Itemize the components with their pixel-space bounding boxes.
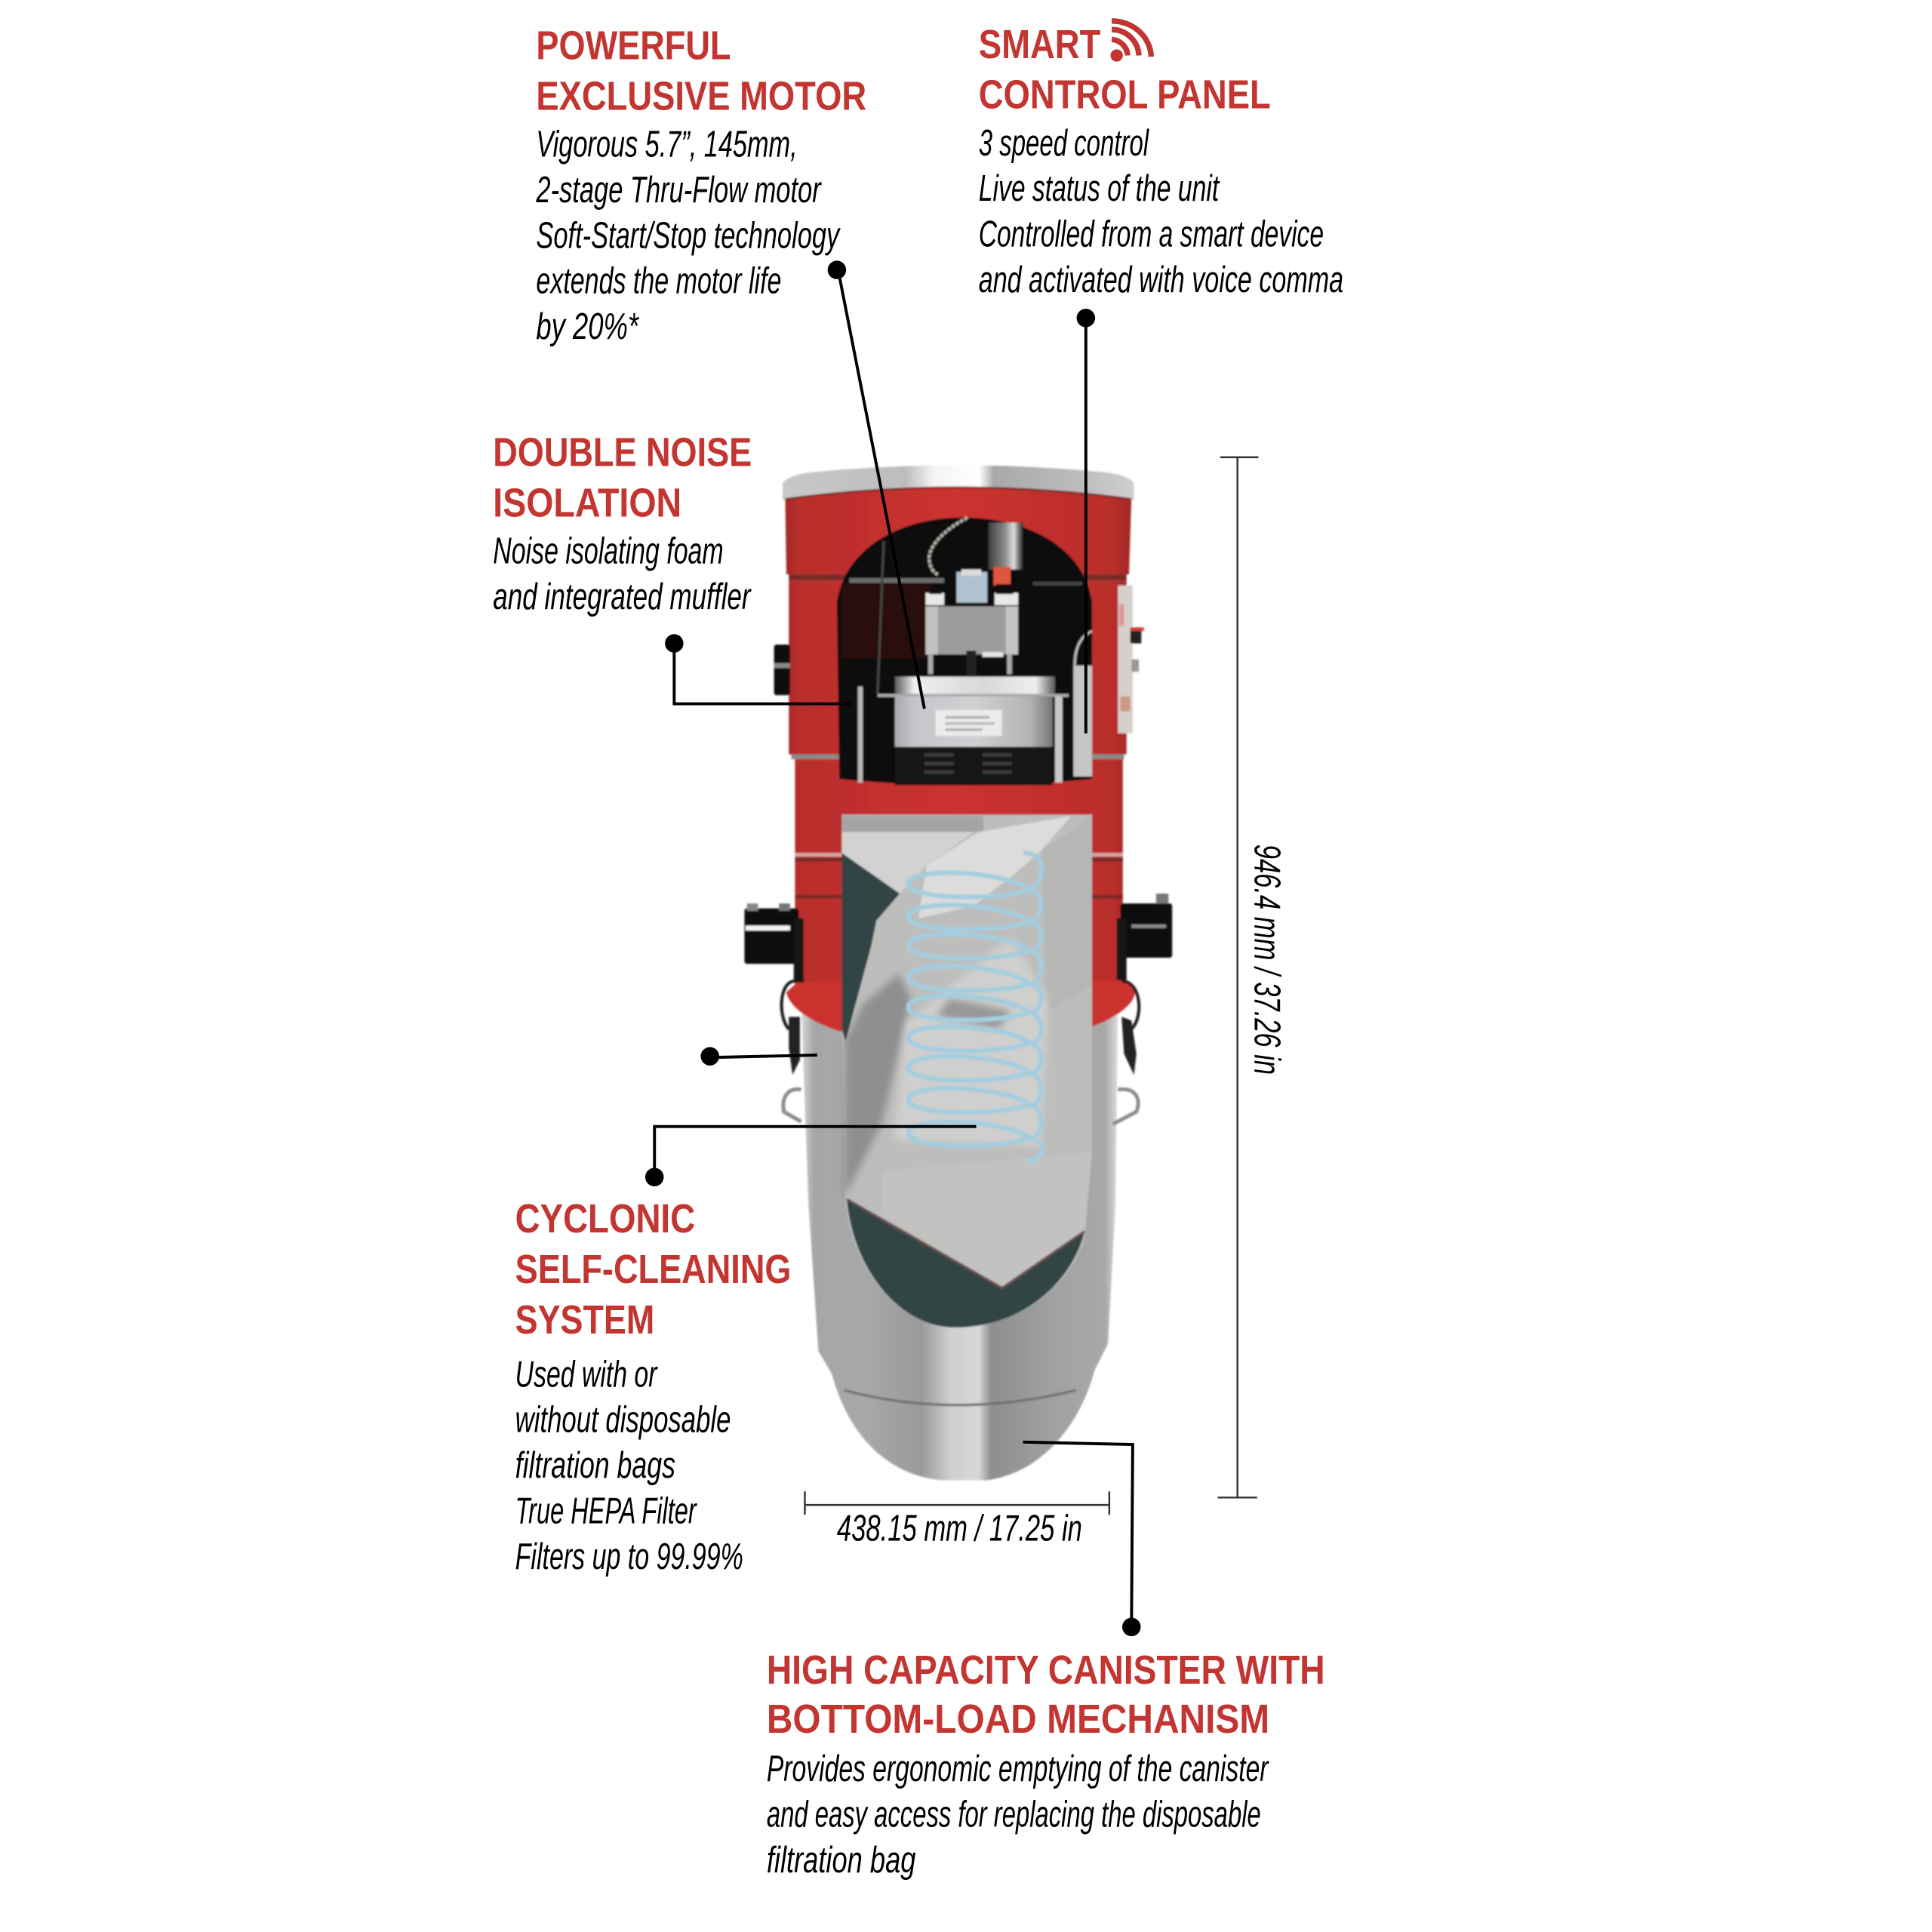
motor label [936, 710, 1002, 736]
support posts [858, 687, 863, 783]
filtration bag window [841, 815, 1092, 1327]
heading: SMART [979, 22, 1100, 67]
heading [767, 1647, 1325, 1742]
leader: motor [828, 260, 924, 709]
description [536, 124, 841, 347]
description: Vigorous 5.7”, 145mm, [536, 124, 798, 165]
callout: cyclonic self-cleaning system [515, 1196, 791, 1577]
description [979, 123, 1343, 300]
icon: wifi signal [1110, 21, 1151, 62]
motor compartment cutaway [837, 518, 1092, 785]
description: Filters up to 99.99% [515, 1537, 743, 1577]
heading: DOUBLE NOISE [493, 429, 752, 475]
exhaust column [989, 522, 1023, 570]
description: filtration bags [515, 1445, 675, 1486]
left hose connector [744, 903, 804, 983]
description: and integrated muffler [493, 577, 752, 617]
lid shadow [785, 488, 1131, 499]
motor grille [895, 747, 1053, 785]
leader: cyclonic system [645, 1127, 976, 1186]
dimension: height: 946.4 mm / 37.26 in [1247, 844, 1287, 1075]
heading: EXCLUSIVE MOTOR [536, 73, 866, 118]
dimension: width: 438.15 mm / 17.25 in [837, 1508, 1082, 1549]
heading: CYCLONIC [515, 1196, 695, 1241]
power cable [929, 518, 968, 574]
description: filtration bag [767, 1840, 915, 1881]
left knob [774, 645, 790, 695]
right latch [1121, 981, 1139, 1075]
callout: powerful exclusive motor [536, 23, 866, 347]
description [767, 1749, 1269, 1881]
heading [979, 22, 1271, 118]
leader: canister [1023, 1442, 1141, 1636]
heading: SELF-CLEANING [515, 1247, 791, 1292]
vacuum unit illustration [744, 466, 1172, 1480]
callout: double noise isolation [493, 429, 752, 617]
right control strip [1118, 586, 1144, 734]
description: Used with or [515, 1354, 658, 1395]
dark lower inner wall [847, 1199, 1084, 1327]
description: Noise isolating foam [493, 531, 724, 571]
description: True HEPA Filter [515, 1491, 697, 1532]
left latch [782, 981, 800, 1075]
canister seam [844, 1390, 1076, 1405]
description: Soft-Start/Stop technology [536, 215, 841, 256]
red upper body [785, 485, 1135, 1033]
description: Live status of the unit [979, 168, 1220, 209]
heading: HIGH CAPACITY CANISTER WITH [767, 1647, 1325, 1693]
description: by 20%* [536, 306, 639, 347]
dimension: width [804, 1491, 1109, 1549]
heading: BOTTOM-LOAD MECHANISM [767, 1697, 1269, 1742]
description: Provides ergonomic emptying of the canister [767, 1749, 1269, 1789]
heading: POWERFUL [536, 23, 731, 68]
right handle [1113, 1089, 1138, 1124]
description: and activated with voice comma [979, 260, 1343, 300]
description [493, 531, 752, 617]
description [515, 1354, 743, 1577]
callout: smart control panel [979, 21, 1343, 300]
heading: ISOLATION [493, 480, 681, 525]
heading [493, 429, 752, 525]
dimension: height [1218, 457, 1287, 1497]
description: extends the motor life [536, 261, 781, 302]
heading: SYSTEM [515, 1297, 654, 1343]
callout: high capacity canister [767, 1647, 1325, 1881]
heading [515, 1196, 791, 1343]
heading: CONTROL PANEL [979, 72, 1271, 118]
leader: filter [700, 1047, 817, 1066]
cyclonic airflow coil [909, 853, 1043, 1161]
leader: control panel [1077, 309, 1095, 734]
right hose connector [1117, 894, 1172, 980]
orange connector [993, 567, 1011, 586]
left handle [783, 1089, 801, 1121]
leader: noise isolation [665, 634, 851, 704]
side electronics panel [1073, 666, 1092, 777]
main motor housing [895, 677, 1055, 694]
motor bracket [926, 607, 1018, 654]
stainless steel canister [801, 1004, 1118, 1480]
description: without disposable [515, 1400, 731, 1441]
description: and easy access for replacing the disposable [767, 1794, 1261, 1835]
description: 3 speed control [979, 123, 1149, 164]
heading [536, 23, 866, 118]
description: 2-stage Thru-Flow motor [536, 170, 822, 211]
description: Controlled from a smart device [979, 214, 1324, 255]
silver lid [783, 466, 1134, 500]
dark upper inner wall [841, 853, 900, 1041]
